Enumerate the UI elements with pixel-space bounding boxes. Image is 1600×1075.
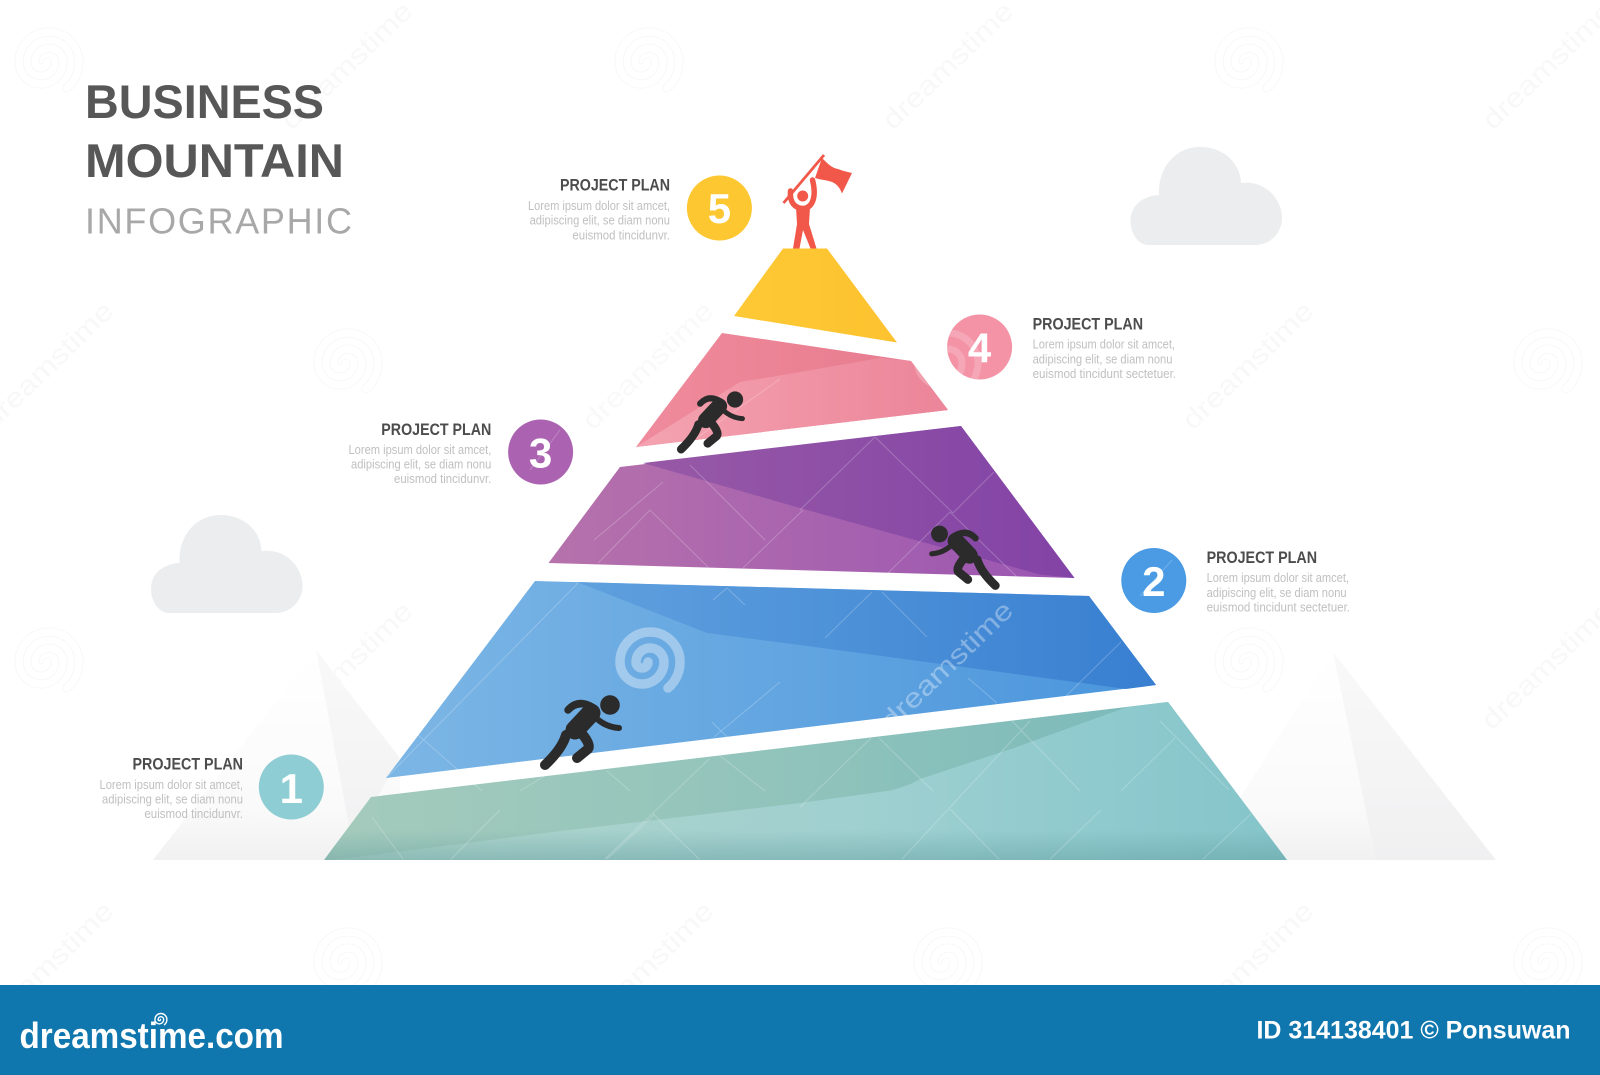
label 5 (528, 176, 670, 242)
pyramid tier 2: blue (386, 581, 1156, 778)
number badge 1: 1 (280, 765, 303, 812)
title: INFOGRAPHIC (85, 200, 352, 242)
number badge 4: 4 (968, 324, 992, 372)
label 3 (348, 421, 491, 486)
number badge 3 (508, 420, 573, 484)
label 3: PROJECT PLAN (381, 421, 491, 439)
pyramid tier 5: yellow (734, 248, 897, 342)
label 4: PROJECT PLAN (1033, 316, 1143, 334)
label 5: adipiscing elit, se diam nonu (530, 214, 670, 228)
label 2: euismod tincidunt sectetuer. (1207, 600, 1350, 614)
label 3: adipiscing elit, se diam nonu (351, 458, 491, 472)
label 4: Lorem ipsum dolor sit amcet, (1033, 338, 1175, 352)
text: dreamstime (275, 596, 418, 735)
number badge 5: 5 (708, 185, 731, 232)
label 2: adipiscing elit, se diam nonu (1207, 586, 1347, 600)
text: dreamstime (576, 296, 719, 435)
label 1 (100, 756, 243, 821)
footer logo: dreamstime.com (20, 1015, 284, 1056)
footer bar (0, 985, 1600, 1075)
label 1: euismod tincidunvr. (144, 807, 243, 821)
label 5: Lorem ipsum dolor sit amcet, (528, 199, 670, 213)
label 4 (1033, 316, 1176, 381)
icon: runner on blue tier (545, 695, 620, 765)
label 2: Lorem ipsum dolor sit amcet, (1207, 571, 1349, 585)
number badge 3: 3 (529, 430, 552, 476)
text: dreamstime (1475, 596, 1600, 735)
text: dreamstime (874, 595, 1019, 736)
label 5: euismod tincidunvr. (572, 228, 670, 242)
text: dreamstime (576, 296, 719, 435)
number badge 4 (947, 314, 1012, 380)
title (85, 76, 352, 242)
label 3: Lorem ipsum dolor sit amcet, (348, 443, 491, 457)
label 4: euismod tincidunt sectetuer. (1033, 367, 1176, 381)
label 1: Lorem ipsum dolor sit amcet, (100, 778, 243, 792)
text: dreamstime (275, 0, 418, 135)
label 2 (1207, 549, 1350, 614)
number badge 5 (687, 176, 752, 240)
text: dreamstime (1476, 0, 1600, 135)
title: MOUNTAIN (85, 135, 344, 188)
label 2: PROJECT PLAN (1207, 549, 1317, 567)
background mountain: left (153, 650, 400, 860)
background mountain: right (1200, 652, 1496, 860)
text: dreamstime (876, 0, 1019, 135)
icon: runner on purple tier (931, 526, 995, 586)
cloud: left (151, 515, 303, 613)
label 3: euismod tincidunvr. (394, 472, 491, 486)
icon: runner on pink tier (681, 391, 743, 449)
icon: person with flag (784, 155, 852, 248)
number badge 2 (1121, 548, 1186, 613)
footer image ID: ID 314138401 © Ponsuwan (1256, 1016, 1570, 1044)
pyramid tier 1: teal (324, 702, 1287, 860)
label 1: PROJECT PLAN (132, 756, 243, 774)
text: dreamstime (1176, 296, 1319, 435)
text: dreamstime (576, 896, 719, 1035)
label 4: adipiscing elit, se diam nonu (1033, 352, 1172, 366)
number badge 1 (259, 754, 324, 820)
number badge 2: 2 (1142, 558, 1165, 605)
pyramid tier 3: purple (548, 426, 1074, 578)
label 1: adipiscing elit, se diam nonu (102, 793, 243, 807)
cloud: upper right (1130, 147, 1282, 245)
title: BUSINESS (85, 76, 324, 129)
label 5: PROJECT PLAN (560, 176, 670, 194)
text: dreamstime (1176, 896, 1319, 1035)
pyramid tier 4: pink (636, 333, 948, 447)
